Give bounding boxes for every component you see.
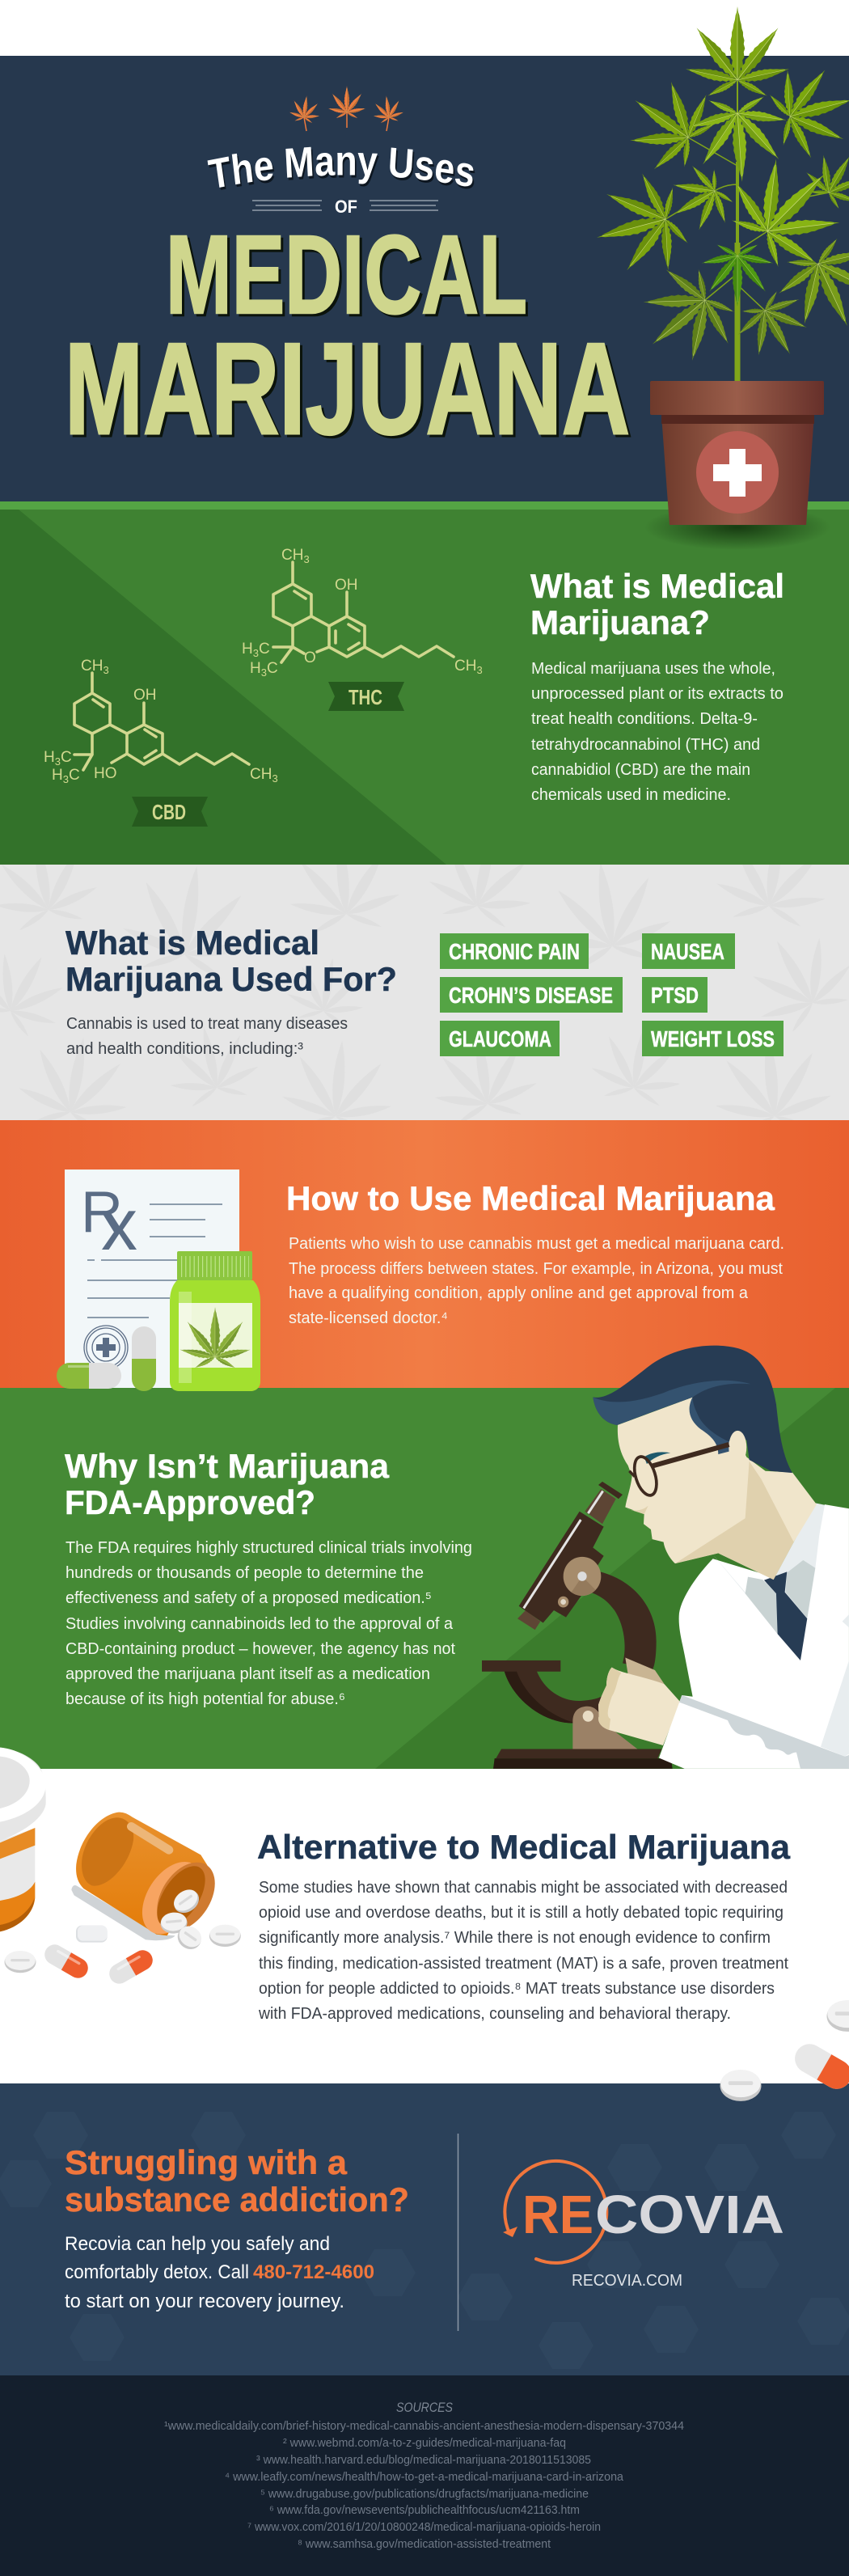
call text: 480-712-4600 (253, 2261, 374, 2283)
text block: what is medical marijuana: Marijuana? (530, 603, 710, 641)
panel: fda approval: Why Isn’t Marijuana (65, 1447, 390, 1485)
molecule: cbd: 3 (272, 772, 278, 785)
scientist with microscope illustration (482, 1346, 849, 1769)
title line: of (252, 197, 438, 217)
title line: medical: MEDICAL (166, 213, 527, 337)
molecule: thc (242, 547, 483, 711)
molecule: thc: C (267, 660, 278, 677)
condition tags: WEIGHT LOSS (651, 1026, 775, 1051)
upright pill bottle (0, 1748, 46, 1931)
panel: fda approval (0, 1388, 849, 1769)
header panel (0, 56, 849, 510)
molecule: cbd: C (69, 767, 80, 784)
panel: alternative: opioid use and overdose deaths, but it is still a hotly debated topic requiring (259, 1904, 784, 1922)
panel: fda approval: FDA-Approved? (65, 1483, 315, 1521)
intro text: and health conditions, including:³ (66, 1040, 303, 1058)
heading (65, 924, 397, 998)
panel: alternative: option for people addicted to opioids.⁸ MAT treats substance use disorders (259, 1980, 775, 1998)
plant pot (650, 381, 824, 525)
molecule: cbd: H (44, 749, 55, 766)
molecule: thc: CH (281, 547, 303, 564)
title (65, 147, 631, 462)
logo: recovia: RECOVIA.COM (572, 2272, 682, 2290)
text block: what is medical marijuana: chemicals used in medicine. (531, 786, 731, 804)
heading: substance addiction? (65, 2181, 409, 2219)
thc label ribbon (328, 682, 404, 711)
panel: fda approval: approved the marijuana plant itself as a medication (65, 1665, 430, 1683)
panel: sources: ⁷ www.vox.com/2016/1/20/10800248/medical-marijuana-opioids-heroin (247, 2521, 601, 2534)
condition tags: CROHN’S DISEASE (449, 983, 613, 1008)
condition tags: NAUSEA (651, 939, 724, 964)
hand (598, 1658, 681, 1745)
what is medical marijuana panel (0, 505, 849, 865)
intro text: Cannabis is used to treat many diseases (66, 1015, 348, 1033)
text block: what is medical marijuana: Medical marijuana uses the whole, (531, 660, 775, 678)
panel: fda approval: because of its high potential for abuse.⁶ (65, 1690, 345, 1708)
medicine bottle (170, 1251, 260, 1391)
panel: sources: ³ www.health.harvard.edu/blog/medical-marijuana-2018011513085 (256, 2454, 591, 2467)
molecule: cbd: CH (250, 766, 272, 783)
panel: fda approval: Studies involving cannabinoids led to the approval of a (65, 1615, 454, 1633)
panel: sources (0, 2375, 849, 2576)
panel: alternative (257, 1828, 791, 2023)
tipped pill bottle (71, 1813, 227, 1954)
loose pills (4, 1925, 241, 1987)
molecule: cbd: H (52, 767, 63, 784)
panel: alternative: with FDA-approved medications, counseling and behavioral therapy. (258, 2005, 731, 2023)
text block: what is medical marijuana: What is Medical (530, 567, 784, 605)
panel: how to use: have a qualifying condition, apply online and get approval from a (289, 1284, 749, 1302)
molecule: thc: C (259, 641, 270, 658)
vertical capsule (132, 1326, 156, 1391)
stem and branches (665, 81, 829, 382)
molecule: cbd: HO (94, 765, 116, 782)
prescription sheet: R (81, 1180, 123, 1245)
panel: fda approval: CBD-containing product – however, the agency has not (65, 1640, 455, 1658)
molecule: thc: 3 (476, 664, 483, 676)
horizontal capsule (57, 1363, 121, 1389)
panel: fda approval: effectiveness and safety of a proposed medication.⁵ (65, 1589, 432, 1607)
microscope (482, 1482, 673, 1769)
molecule: thc: H (250, 660, 261, 677)
molecule: thc: O (304, 649, 316, 666)
text block: what is medical marijuana: unprocessed plant or its extracts to (531, 685, 784, 703)
cbd label ribbon: CBD (152, 800, 186, 824)
molecule: thc: CH (454, 658, 476, 675)
panel: alternative: Alternative to Medical Marijuana (257, 1828, 791, 1866)
panel: fda approval: The FDA requires highly structured clinical trials involving (65, 1539, 472, 1557)
leaves (766, 226, 849, 347)
text block: what is medical marijuana: cannabidiol (CBD) are the main (531, 761, 750, 779)
panel: alternative: Some studies have shown that cannabis might be associated with decreased (259, 1879, 788, 1897)
molecule: thc: 3 (261, 666, 267, 679)
molecule: cbd: 3 (63, 773, 69, 785)
molecule: cbd: CH (81, 658, 103, 675)
icon: stamp (84, 1326, 128, 1369)
decorative leaves: three orange leaves (288, 86, 405, 131)
overlapping pills (720, 2000, 849, 2101)
molecule: thc: 3 (253, 647, 259, 659)
molecule: thc: OH (335, 577, 357, 594)
molecule: cbd: OH (133, 687, 157, 704)
molecule: thc: 3 (303, 553, 310, 565)
title line: of: OF (335, 197, 357, 217)
molecule: cbd: 3 (55, 755, 61, 768)
molecule: thc: H (242, 641, 253, 658)
panel: medical uses (0, 865, 849, 1120)
panel: sources: SOURCES (396, 2400, 454, 2415)
intro text (66, 1015, 348, 1058)
cbd label ribbon (132, 797, 208, 827)
text block: what is medical marijuana: treat health conditions. Delta-9- (531, 710, 758, 728)
panel: sources: ² www.webmd.com/a-to-z-guides/medical-marijuana-faq (283, 2437, 566, 2450)
panel: sources: ⁶ www.fda.gov/newsevents/publichealthfocus/ucm421163.htm (269, 2504, 580, 2517)
prescription and medicine illustration (57, 1170, 260, 1391)
panel: sources: ⁵ www.drugabuse.gov/publications/drugfacts/marijuana-medicine (260, 2488, 589, 2501)
panel: alternative: this finding, medication-assisted treatment (MAT) is a safe, proven treatment (259, 1955, 788, 1973)
call text: comfortably detox. Call (65, 2261, 249, 2283)
prescription sheet (65, 1170, 239, 1388)
pot shadow (644, 505, 830, 550)
heading (65, 2143, 409, 2219)
panel: fda approval: hundreds or thousands of people to determine the (65, 1564, 424, 1582)
condition tags: GLAUCOMA (449, 1026, 551, 1051)
panel: sources: ⁴ www.leafly.com/news/health/how-to-get-a-medical-marijuana-card-in-arizona (225, 2471, 624, 2484)
call text: to start on your recovery journey. (65, 2290, 344, 2312)
thc label ribbon: THC (348, 685, 382, 709)
plant illustration (584, 6, 849, 382)
head (593, 1346, 817, 1580)
glasses (629, 1445, 729, 1498)
spilled pills illustration (0, 1748, 241, 1987)
panel: call to action (0, 2083, 849, 2375)
panel: sources: ¹www.medicaldaily.com/brief-history-medical-cannabis-ancient-anesthesia-modern-dispensary-370344 (164, 2420, 684, 2433)
text block: what is medical marijuana: tetrahydrocannabinol (THC) and (531, 736, 760, 754)
heading: Struggling with a (65, 2143, 348, 2181)
title line: the many uses: The Many Uses (207, 147, 475, 190)
heading: What is Medical (65, 924, 319, 962)
heading: Marijuana Used For? (65, 960, 397, 998)
condition tags (440, 933, 784, 1056)
panel: how to use: The process differs between states. For example, in Arizona, you must (289, 1260, 783, 1278)
lab coat (659, 1503, 849, 1769)
panel: how to use: Patients who wish to use cannabis must get a medical marijuana card. (289, 1235, 784, 1253)
panel: alternative: significantly more analysis.⁷ While there is not enough evidence to confirm (259, 1929, 771, 1947)
molecule: cbd: 3 (103, 664, 109, 676)
panel: how to use: How to Use Medical Marijuana (286, 1179, 775, 1217)
logo: recovia: COVIA (595, 2185, 784, 2245)
logo: recovia: RE (522, 2185, 593, 2245)
molecule: cbd (44, 658, 278, 827)
panel: sources: ⁸ www.samhsa.gov/medication-assisted-treatment (298, 2538, 551, 2551)
call text: Recovia can help you safely and (65, 2233, 330, 2255)
title line: marijuana: MARIJUANA (65, 316, 630, 462)
panel: how to use: state-licensed doctor.⁴ (289, 1309, 448, 1327)
prescription sheet: x (101, 1185, 137, 1266)
call text (65, 2233, 374, 2312)
text block: what is medical marijuana (530, 567, 784, 804)
panel: how to use (0, 1120, 849, 1388)
logo: recovia (503, 2161, 784, 2290)
condition tags: CHRONIC PAIN (449, 939, 580, 964)
molecule: cbd: C (61, 749, 72, 766)
icon: cannabis leaf (179, 1307, 251, 1370)
icon: medical cross (696, 431, 779, 514)
condition tags: PTSD (651, 983, 699, 1008)
